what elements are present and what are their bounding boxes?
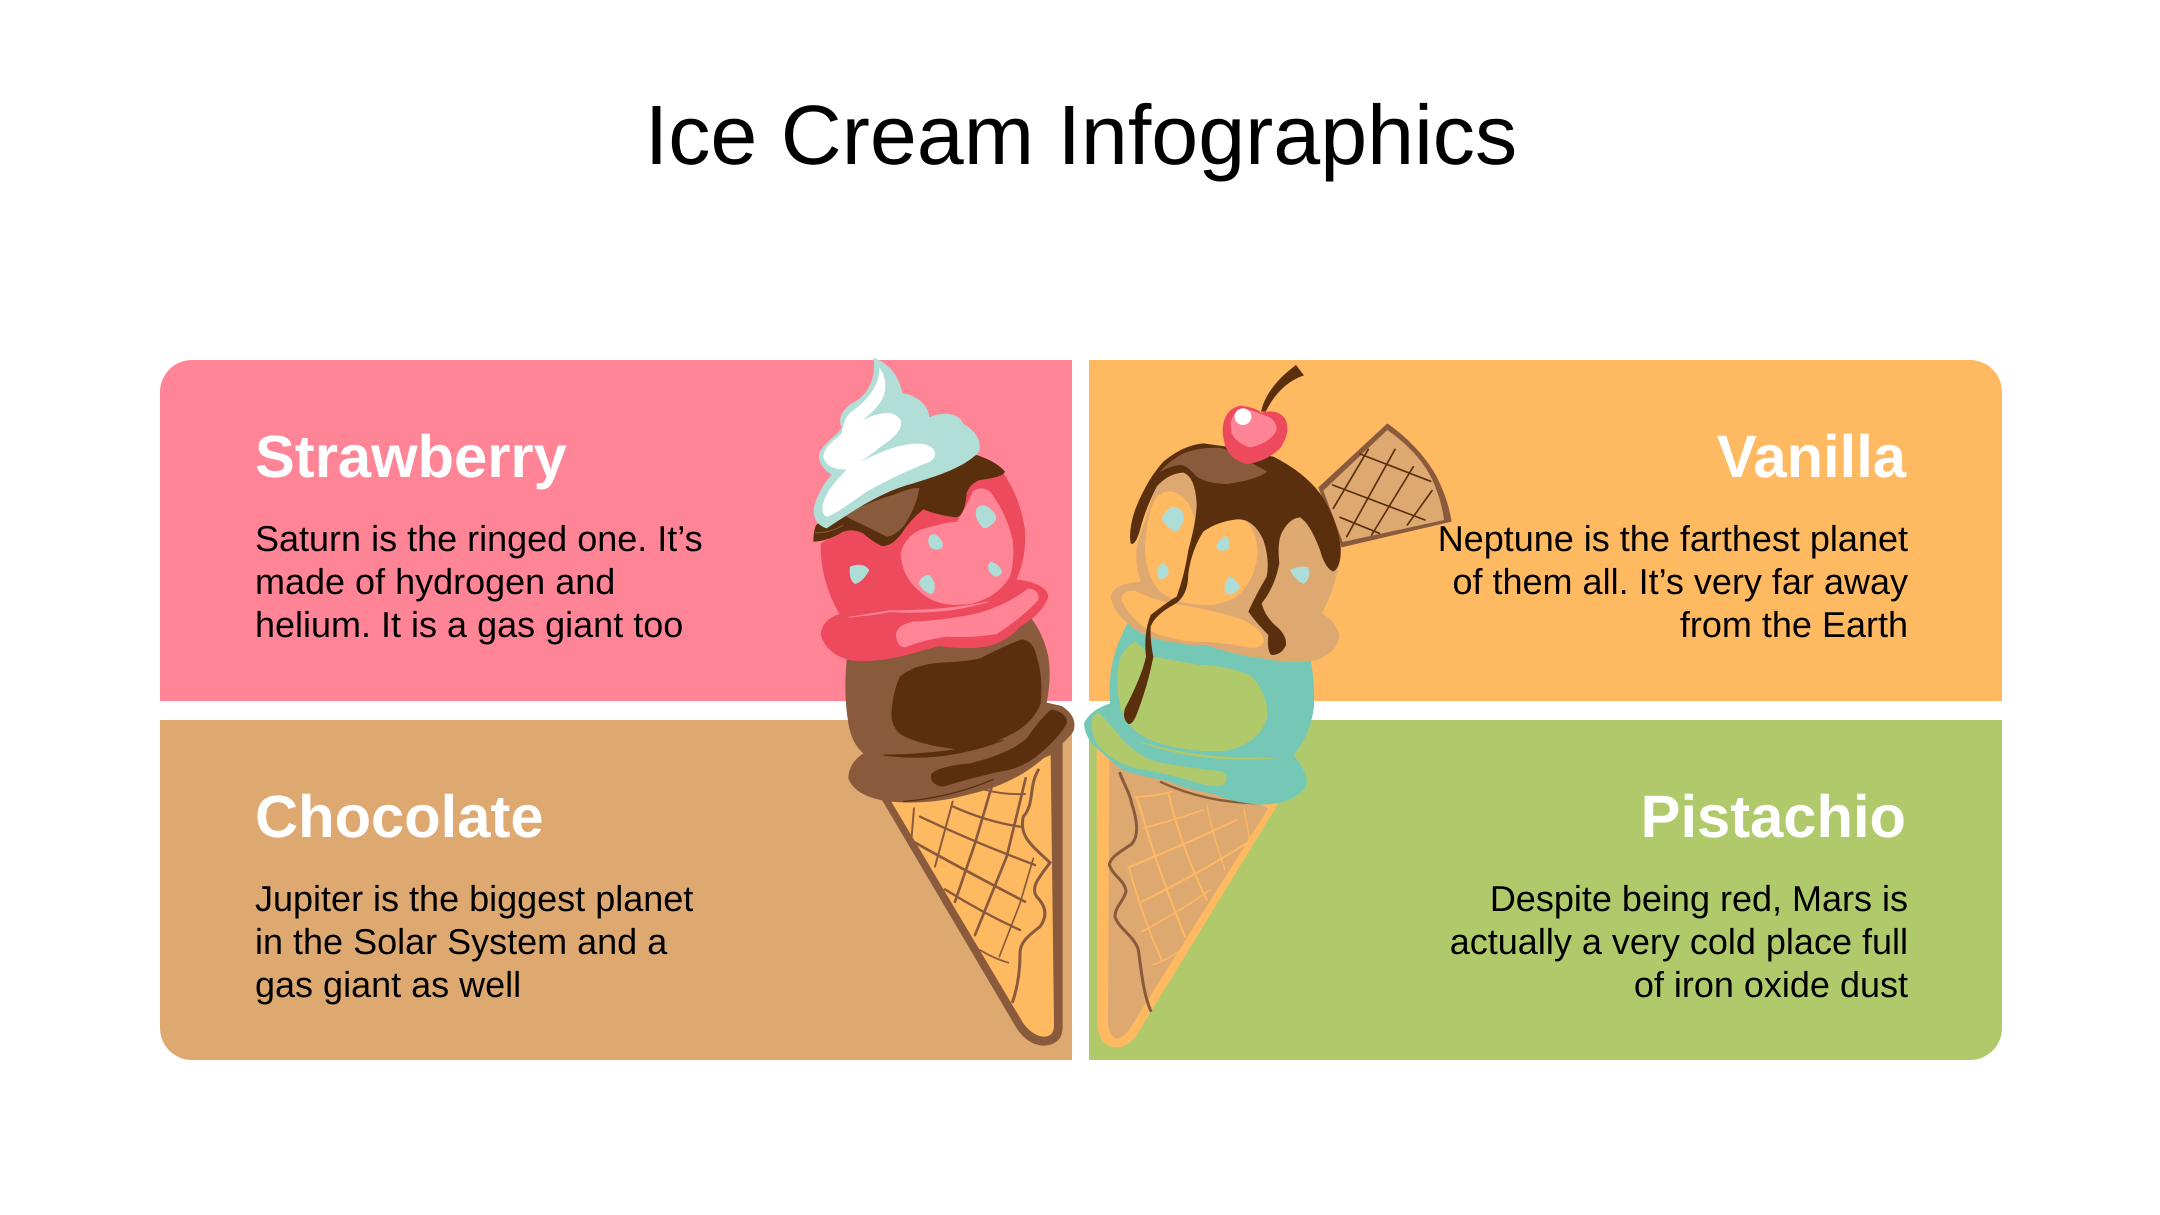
panel: chocolate xyxy=(160,720,1072,1060)
text: chocolate xyxy=(255,878,693,1005)
text: chocolate: Jupiter is the biggest planet xyxy=(255,878,693,919)
heading: strawberry: Strawberry xyxy=(255,423,567,490)
text: strawberry: helium. It is a gas giant too xyxy=(255,604,683,645)
chocolate sauce on vanilla xyxy=(1124,443,1341,724)
text: strawberry: Saturn is the ringed one. It’s xyxy=(255,518,703,559)
text: pistachio: actually a very cold place full xyxy=(1450,921,1908,962)
whipped cream xyxy=(814,357,980,528)
chocolate sauce on strawberry xyxy=(813,455,1005,546)
text: pistachio: of iron oxide dust xyxy=(1634,964,1908,1005)
panel: vanilla xyxy=(1089,360,2002,701)
text: vanilla: of them all. It’s very far away xyxy=(1452,561,1908,602)
text: vanilla: Neptune is the farthest planet xyxy=(1438,518,1908,559)
strawberry scoop xyxy=(821,473,1048,661)
text: pistachio: Despite being red, Mars is xyxy=(1490,878,1908,919)
heading: chocolate: Chocolate xyxy=(255,783,544,850)
text: chocolate: in the Solar System and a xyxy=(255,921,667,962)
panel: pistachio xyxy=(1089,720,2002,1060)
left waffle cone xyxy=(880,740,1063,1046)
title: Ice Cream Infographics xyxy=(645,88,1517,182)
icon: right ice cream cone xyxy=(1084,365,1452,1048)
chocolate scoop xyxy=(845,617,1074,802)
heading: pistachio: Pistachio xyxy=(1641,783,1906,850)
icon: left ice cream cone xyxy=(813,357,1074,1046)
pistachio scoop xyxy=(1084,622,1314,805)
text: vanilla xyxy=(1438,518,1908,645)
vanilla scoop xyxy=(1111,473,1340,662)
text: strawberry: made of hydrogen and xyxy=(255,561,615,602)
cherry xyxy=(1223,365,1304,464)
text: strawberry xyxy=(255,518,703,645)
chocolate scoop drip xyxy=(883,709,1067,802)
text: chocolate: gas giant as well xyxy=(255,964,521,1005)
right waffle cone xyxy=(1097,747,1278,1048)
text: pistachio xyxy=(1450,878,1908,1005)
heading: vanilla: Vanilla xyxy=(1717,423,1906,490)
panel: strawberry xyxy=(160,360,1072,701)
text: vanilla: from the Earth xyxy=(1680,604,1908,645)
wafer xyxy=(1318,423,1452,547)
